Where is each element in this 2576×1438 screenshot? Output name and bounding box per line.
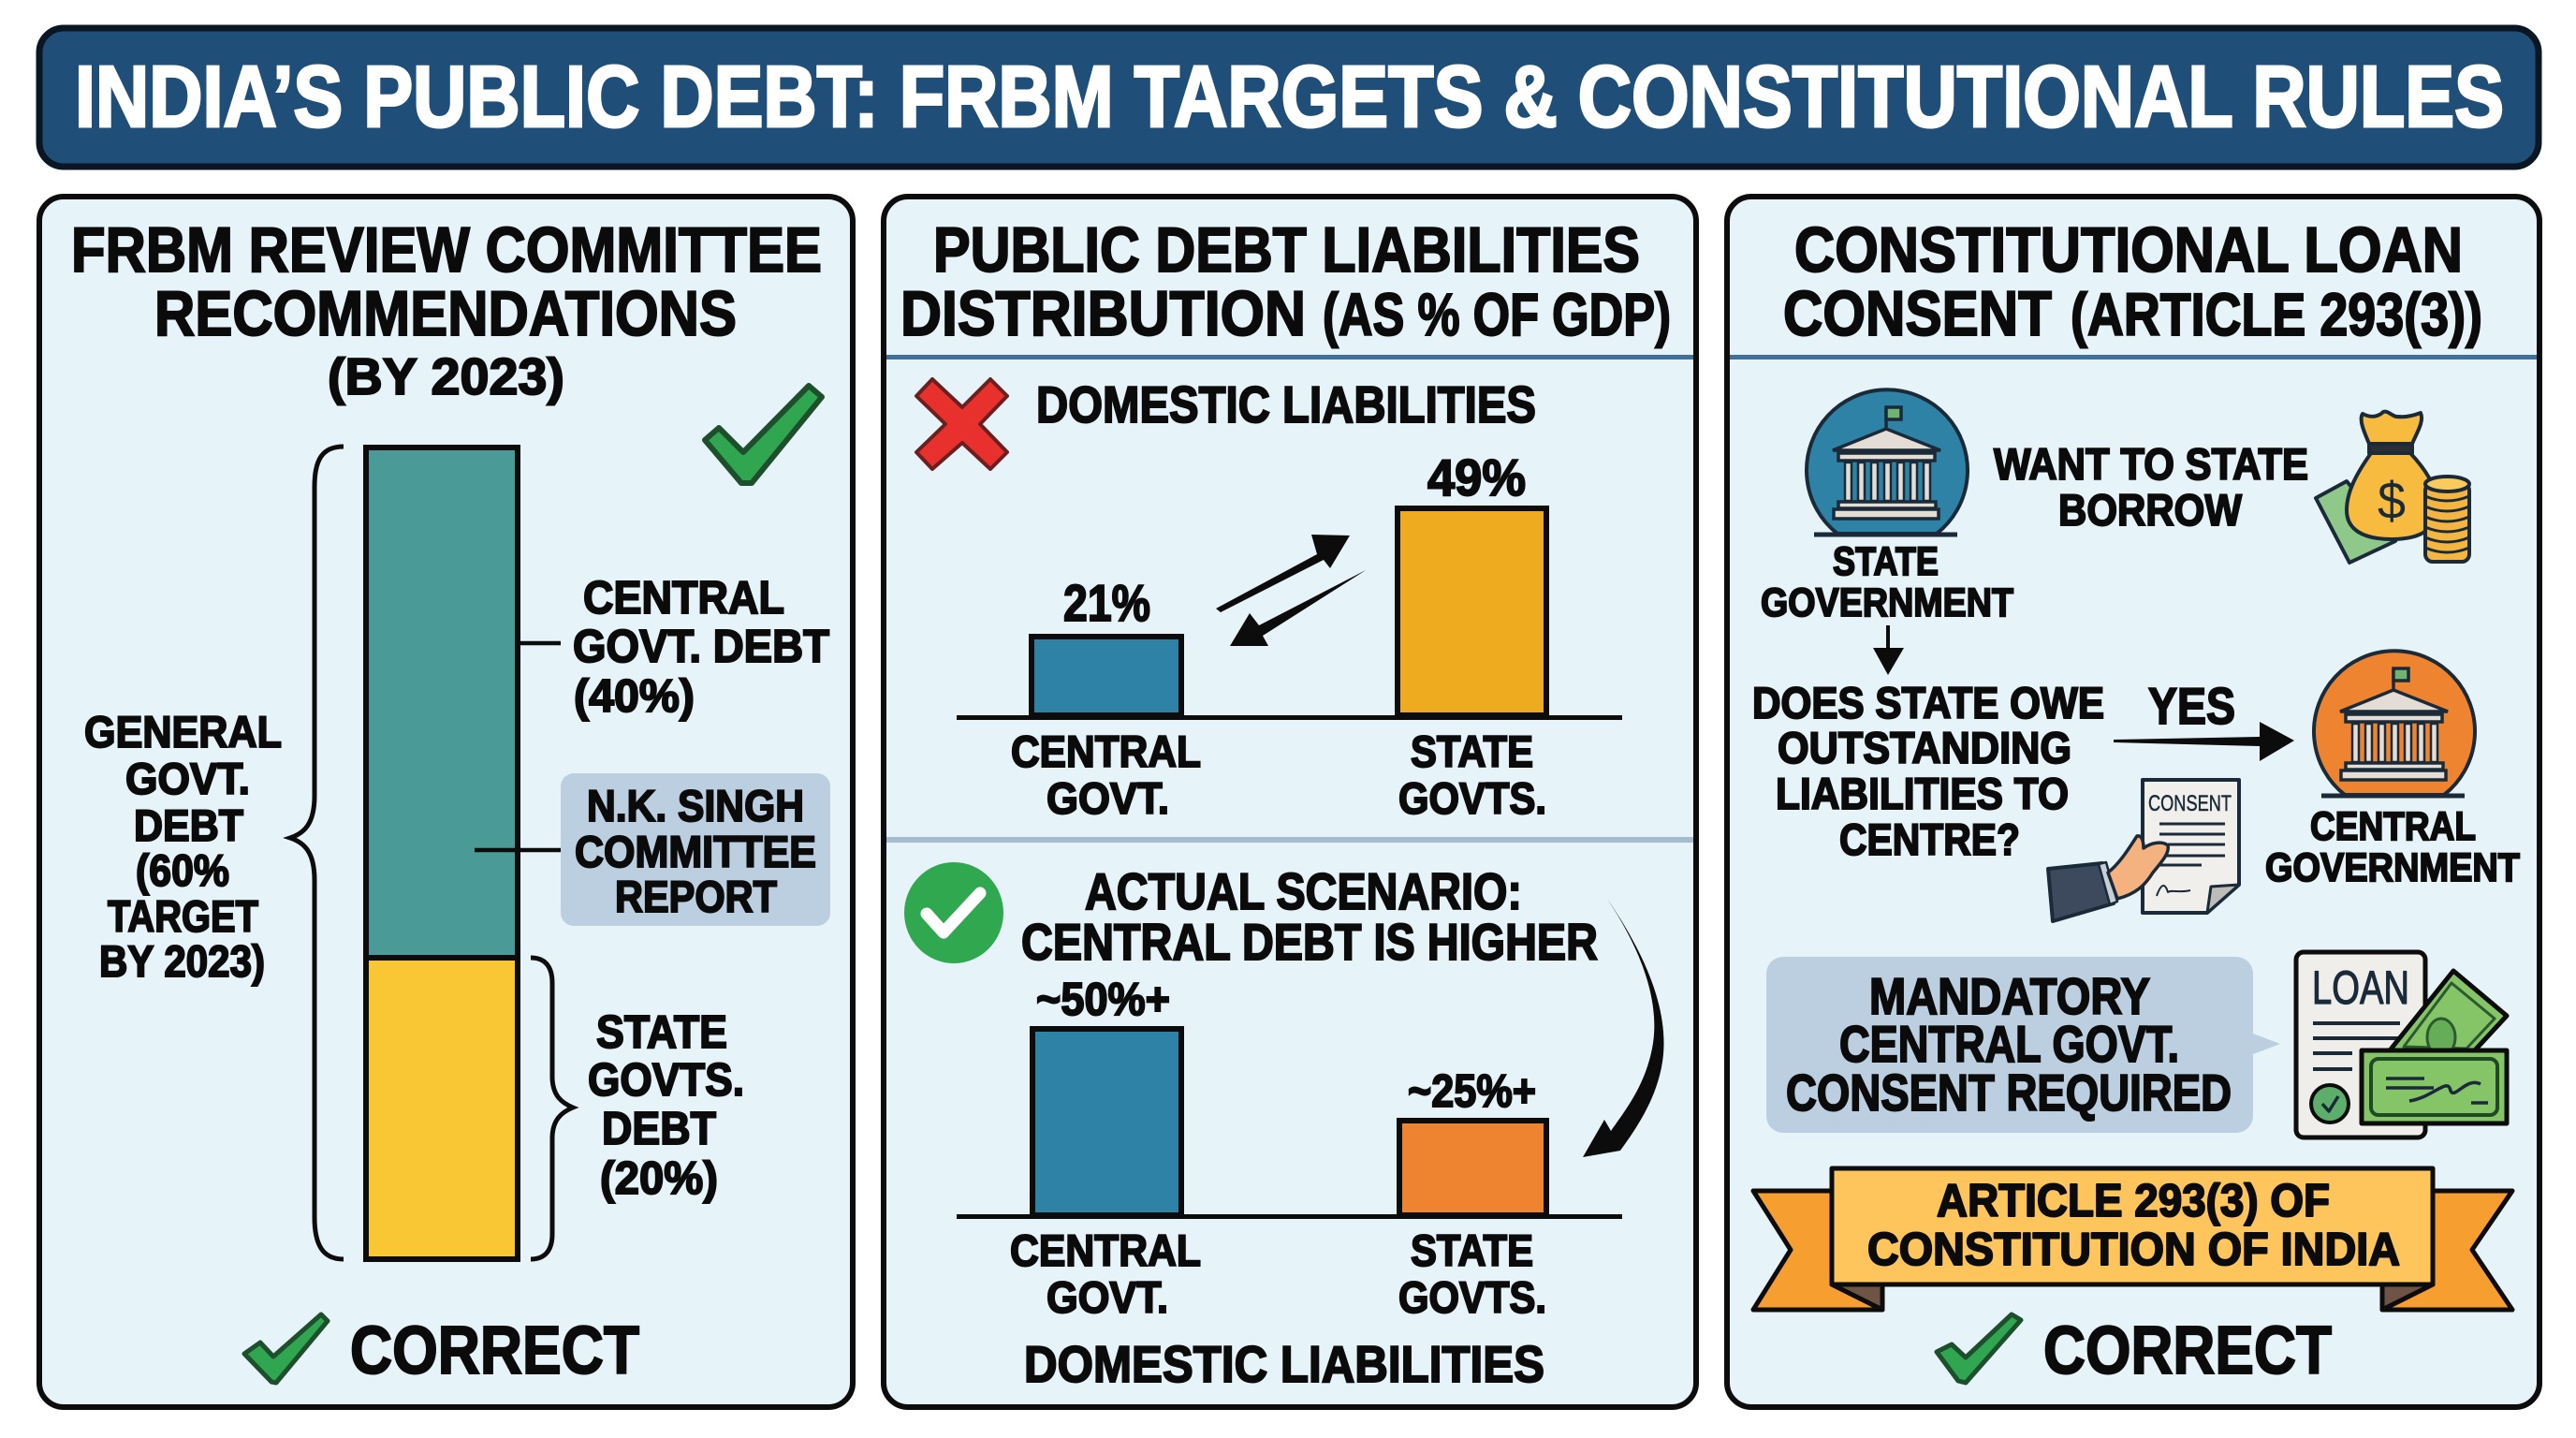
text: does state owe question: OUTSTANDING	[1778, 723, 2071, 772]
callout: N.K. Singh committee report	[475, 773, 830, 926]
bar chart: actual distribution: CENTRAL	[1010, 1225, 1201, 1275]
icon: consent document with hand: CONSENT	[2148, 791, 2232, 816]
arrow: up and down exchange arrows	[1216, 535, 1366, 646]
brace: general government debt	[290, 447, 344, 1259]
arrow: curved arrow to state bar	[1583, 899, 1664, 1157]
label: central government: CENTRAL	[2310, 804, 2476, 849]
label: central government	[2265, 804, 2520, 890]
callout: mandatory central govt consent	[1766, 957, 2280, 1133]
callout: mandatory central govt consent: CENTRAL GOVT.	[1839, 1015, 2179, 1073]
panel heading: public debt liabilities: DISTRIBUTION	[900, 278, 1306, 349]
icon: loan document with banknotes	[2296, 952, 2507, 1137]
bar chart: claimed distribution: 49%	[1427, 448, 1526, 506]
bar chart: claimed distribution: GOVT.	[1046, 773, 1169, 823]
text: want to state borrow: WANT TO STATE	[1994, 439, 2308, 489]
text: does state owe question: CENTRE?	[1839, 814, 2020, 864]
text: central govt debt 40%	[573, 573, 829, 722]
icon: red cross	[916, 379, 1007, 469]
text: does state owe question: DOES STATE OWE	[1752, 678, 2104, 727]
panel heading: FRBM review committee: RECOMMENDATIONS	[154, 278, 737, 349]
bar chart: claimed distribution	[957, 448, 1622, 823]
icon: large green check mark	[705, 386, 822, 483]
callout: mandatory central govt consent: CONSENT REQUIRED	[1786, 1064, 2232, 1122]
callout: N.K. Singh committee report: COMMITTEE	[575, 827, 816, 876]
subheading: actual scenario: ACTUAL SCENARIO:	[1085, 862, 1522, 920]
brace: state govts debt	[531, 958, 573, 1259]
stacked bar chart: general government debt	[366, 448, 518, 1259]
text: does state owe question	[1752, 678, 2104, 864]
bar chart: actual distribution: STATE	[1411, 1225, 1533, 1275]
verdict: correct: CORRECT	[350, 1313, 639, 1388]
panel heading: public debt liabilities: (AS % OF GDP)	[1323, 281, 1671, 348]
panel heading: constitutional loan consent: CONSTITUTIONAL LOAN	[1794, 214, 2463, 286]
verdict: correct: CORRECT	[2043, 1313, 2332, 1388]
text: state govts debt 20%: (20%)	[600, 1153, 718, 1204]
panel heading: public debt liabilities	[900, 214, 1671, 349]
label: state government	[1761, 539, 2013, 625]
icon: loan document with banknotes: LOAN	[2312, 961, 2409, 1014]
bar chart: claimed distribution: CENTRAL	[1011, 726, 1201, 776]
ribbon banner: article 293(3) of constitution of india	[1753, 1168, 2512, 1310]
icon: money bag with coins: $	[2378, 471, 2406, 530]
bar chart: actual distribution: ~25%+	[1408, 1066, 1536, 1117]
panel heading: FRBM review committee	[71, 214, 822, 405]
panel: public debt liabilities distribution	[884, 197, 1696, 1407]
text: general government debt target: GENERAL	[84, 707, 282, 756]
title banner	[39, 28, 2539, 167]
panel heading: FRBM review committee: FRBM REVIEW COMMITTEE	[71, 214, 822, 286]
panel: FRBM review committee recommendations	[39, 197, 853, 1407]
label: central government: GOVERNMENT	[2265, 845, 2520, 890]
caption: domestic liabilities: DOMESTIC LIABILITIES	[1024, 1335, 1544, 1393]
callout: mandatory central govt consent: MANDATORY	[1869, 967, 2150, 1025]
text: general government debt target: GOVT.	[125, 754, 250, 803]
panel heading: constitutional loan consent: (ARTICLE 293(3))	[2071, 281, 2482, 348]
text: general government debt target: (60%	[136, 845, 229, 895]
subheading: actual scenario	[1021, 862, 1598, 971]
text: central govt debt 40%: GOVT. DEBT	[573, 622, 829, 672]
text: state govts debt 20%: GOVTS.	[588, 1055, 744, 1106]
text: central govt debt 40%: (40%)	[574, 671, 695, 722]
panel heading: FRBM review committee: (BY 2023)	[328, 347, 564, 405]
icon: central government building	[2314, 651, 2475, 796]
panel: constitutional loan consent	[1727, 197, 2539, 1407]
text: general government debt target	[84, 707, 282, 986]
callout: N.K. Singh committee report: N.K. SINGH	[587, 781, 804, 830]
subheading: domestic liabilities (incorrect): DOMESTIC LIABILITIES	[1036, 375, 1536, 433]
text: general government debt target: DEBT	[134, 800, 243, 850]
callout: N.K. Singh committee report: REPORT	[615, 872, 777, 921]
arrow: state government down to question	[1873, 625, 1904, 675]
bar chart: claimed distribution: STATE	[1411, 726, 1533, 776]
arrow: yes to central government	[2114, 722, 2294, 761]
leader line: central govt debt	[519, 641, 561, 645]
subheading: actual scenario: CENTRAL DEBT IS HIGHER	[1021, 913, 1598, 971]
icon: money bag with coins	[2316, 412, 2469, 563]
panel heading: constitutional loan consent	[1783, 214, 2482, 349]
icon: consent document with hand	[2048, 780, 2239, 921]
text: state govts debt 20%: STATE	[596, 1007, 727, 1058]
icon: green check circle	[904, 862, 1003, 963]
bar chart: actual distribution: GOVT.	[1046, 1272, 1168, 1322]
icon: state government building	[1807, 389, 1968, 535]
label: state government: GOVERNMENT	[1761, 580, 2013, 625]
text: central govt debt 40%: CENTRAL	[583, 573, 784, 624]
label: yes: YES	[2148, 677, 2235, 735]
ribbon banner: article 293(3) of constitution of india: ARTICLE 293(3) OF	[1937, 1176, 2330, 1226]
bar chart: actual distribution: ~50%+	[1036, 975, 1170, 1025]
bar chart: claimed distribution: GOVTS.	[1398, 773, 1546, 823]
bar chart: actual distribution: GOVTS.	[1398, 1272, 1546, 1322]
panel heading: constitutional loan consent: CONSENT	[1783, 278, 2052, 349]
panel heading: public debt liabilities: PUBLIC DEBT LIABILITIES	[933, 214, 1640, 286]
text: does state owe question: LIABILITIES TO	[1776, 769, 2069, 818]
text: general government debt target: TARGET	[108, 891, 258, 941]
text: state govts debt 20%: DEBT	[602, 1104, 716, 1154]
bar chart: claimed distribution: 21%	[1063, 574, 1150, 632]
verdict: correct	[1937, 1313, 2332, 1388]
bar chart: actual distribution	[957, 975, 1622, 1322]
text: want to state borrow	[1994, 439, 2308, 535]
text: general government debt target: BY 2023)	[99, 936, 265, 986]
verdict: correct	[244, 1313, 639, 1388]
ribbon banner: article 293(3) of constitution of india: CONSTITUTION OF INDIA	[1867, 1225, 2400, 1275]
text: want to state borrow: BORROW	[2058, 485, 2243, 535]
label: state government: STATE	[1833, 539, 1939, 584]
text: state govts debt 20%	[588, 1007, 744, 1204]
